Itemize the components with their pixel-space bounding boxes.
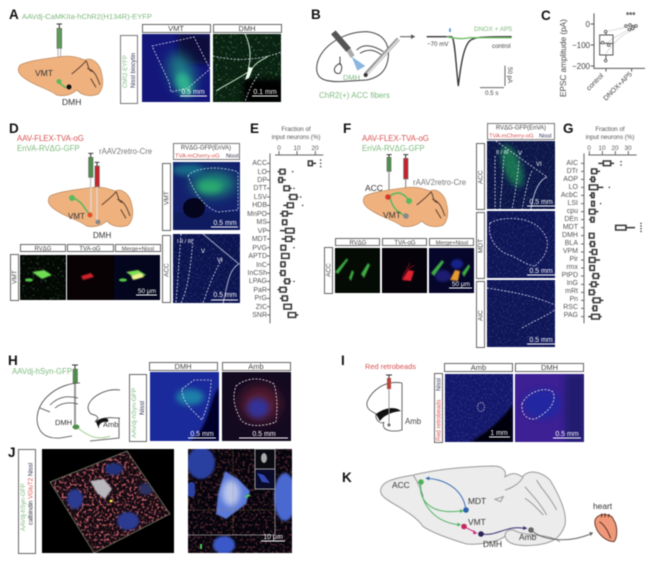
virus labels: AAV-FLEX-TVA-oG — [362, 134, 429, 143]
Amb label: Amb — [405, 417, 422, 426]
brain diagram: ACC — [365, 183, 383, 193]
header Amb: Amb — [248, 362, 264, 371]
C axis labels: DNOX+AP5 — [602, 71, 634, 102]
MDT micrograph — [486, 210, 556, 279]
circuit labels: heart — [593, 501, 613, 511]
panel H — [8, 353, 291, 442]
virus labels — [17, 134, 152, 156]
micrograph DMH — [149, 371, 220, 442]
syringe and brainstem section — [367, 375, 402, 431]
coronal section: DMH — [55, 418, 72, 427]
image headers: Merge+Nissl — [122, 246, 154, 252]
header Amb — [444, 363, 512, 372]
micrograph VMT: 0.5 mm — [181, 89, 205, 96]
region labels: LSI — [567, 200, 578, 207]
circuit labels: Amb — [519, 532, 537, 542]
region labels: VP — [258, 228, 267, 235]
C axis labels — [559, 11, 636, 102]
confocal micrograph — [187, 448, 293, 554]
region labels: Pir — [569, 256, 579, 263]
C axis labels: 0 — [586, 20, 591, 29]
panel letter J: J — [8, 445, 16, 460]
region labels: mRt — [565, 288, 578, 295]
ACC micrograph: 0.5 mm — [529, 199, 553, 206]
brainstem section — [88, 390, 120, 441]
EPSC amplitude boxplot — [591, 13, 645, 72]
micrograph merge — [428, 247, 475, 294]
C axis labels: *** — [626, 11, 636, 20]
region labels: AcbC — [561, 192, 578, 199]
micrograph TVA-oG — [66, 254, 115, 301]
brain diagram: VMT — [35, 68, 53, 78]
micrograph merge: 50 μm — [452, 281, 470, 288]
ACC side box — [476, 144, 484, 210]
region labels: VPM — [563, 248, 578, 255]
ACC micrograph: V — [201, 249, 205, 255]
AIC micrograph: 0.5 mm — [529, 337, 553, 344]
retrobead label: Red retrobeads — [365, 362, 416, 371]
panel K — [342, 466, 617, 549]
virus labels: EnVA-RVΔG-GFP — [362, 144, 425, 153]
virus labels: rAAV2retro-Cre — [413, 178, 466, 187]
region labels: MDT — [563, 224, 579, 231]
region labels: MS — [256, 219, 267, 226]
C axis labels: −200 — [572, 62, 591, 71]
trace labels: −70 mV — [427, 41, 449, 48]
VMT side box — [162, 164, 170, 230]
micrograph RVdG — [334, 247, 381, 294]
ACC micrograph: V — [518, 151, 522, 157]
region labels: ACC — [252, 160, 267, 167]
region labels: PVG — [252, 245, 267, 252]
panel A — [9, 7, 283, 107]
header Amb: Amb — [471, 363, 486, 372]
chart title — [272, 126, 320, 152]
chart title: Fraction of — [281, 126, 311, 133]
grey brain outline — [381, 466, 565, 546]
trace labels: 0.5 s — [485, 90, 498, 97]
trace labels: control — [492, 43, 511, 50]
region labels: HDB — [252, 202, 267, 209]
region labels: MnPO — [247, 211, 268, 218]
image headers: TVA-oG — [394, 240, 416, 246]
panel letter E: E — [250, 121, 259, 136]
panel J — [8, 445, 296, 554]
right header: TVA-mCherry-oG — [489, 134, 534, 140]
header VMT: VMT — [168, 24, 184, 33]
region labels: PtPD — [562, 272, 578, 279]
virus labels: rAAV2retro-Cre — [99, 147, 152, 156]
micrograph merge — [113, 254, 161, 301]
C axis labels: control — [585, 72, 606, 92]
circuit arrows — [420, 476, 593, 540]
3D micrograph — [41, 448, 175, 554]
ACC side label: ACC — [326, 263, 332, 277]
VMT side label: VMT — [12, 270, 18, 284]
micrograph Amb — [221, 371, 292, 442]
stain label box — [120, 36, 138, 104]
panel C — [541, 8, 645, 102]
right header: RVΔG-GFP(EnVA) — [496, 126, 546, 132]
VMT side label — [10, 254, 18, 300]
fraction boxplot — [267, 151, 323, 323]
chart title: 10 — [598, 145, 606, 152]
region labels: DP — [257, 177, 267, 184]
chart title — [586, 126, 634, 152]
ACC micrograph: VI — [536, 162, 542, 168]
panel letter K: K — [342, 470, 352, 485]
stain label box: calbindin VGluT2 Nissl — [28, 463, 34, 525]
trace labels: DNOX + AP5 — [474, 26, 512, 33]
region labels: DMH — [562, 232, 578, 239]
MDT side box: MDT — [478, 239, 484, 253]
header DMH: DMH — [174, 362, 192, 371]
image headers — [20, 244, 160, 252]
image headers: RVΔG — [35, 246, 52, 252]
brain diagram: DMH — [93, 231, 111, 240]
micrograph DMH: 0.5 mm — [555, 431, 579, 438]
panel letter A: A — [9, 7, 19, 22]
panel I — [341, 353, 585, 442]
MDT micrograph: 0.5 mm — [529, 268, 553, 275]
chart title: 0 — [277, 145, 281, 152]
brain slice with optic fiber and pipette — [317, 32, 415, 82]
chart title: input neurons (%) — [272, 134, 320, 141]
panel F — [324, 121, 555, 348]
panel G — [561, 121, 641, 323]
region labels: DTr — [567, 168, 579, 175]
fraction boxplot — [581, 151, 641, 323]
panel letter H: H — [8, 353, 18, 368]
DMH label: DMH — [343, 73, 360, 82]
region labels: RSC — [563, 304, 578, 311]
micrograph DMH — [212, 33, 282, 103]
ACC micrograph: I II / III — [177, 239, 193, 245]
region labels: PAG — [564, 312, 578, 319]
right header: RVΔG-GFP(EnVA) — [181, 146, 231, 152]
C axis labels: EPSC amplitude (pA) — [559, 19, 568, 97]
right header: TVA-mCherry-oG — [175, 154, 220, 160]
right header: Nissl — [226, 154, 239, 160]
ACC micrograph: 0.5 mm — [213, 292, 237, 299]
region labels — [561, 160, 579, 319]
micrograph DMH: 0.1 mm — [253, 89, 277, 96]
stain label box — [18, 450, 36, 554]
ACC micrograph: VI — [217, 258, 223, 264]
micrograph Amb: 1 mm — [490, 430, 508, 437]
micrograph Amb — [444, 373, 514, 443]
region labels: PrG — [255, 295, 267, 302]
AIC micrograph — [486, 279, 556, 348]
stain label box: Nissl biocytin — [131, 53, 137, 88]
brain diagram: VMT — [68, 212, 85, 221]
header DMH — [214, 24, 282, 33]
header DMH — [150, 362, 218, 371]
image headers — [336, 238, 474, 246]
circuit labels: MDT — [468, 496, 486, 506]
panel letter G: G — [563, 121, 574, 136]
icon: heart — [595, 513, 617, 542]
ACC side label — [324, 248, 332, 294]
brain diagram — [48, 178, 133, 240]
syringes — [88, 153, 99, 223]
ACC micrograph — [486, 140, 556, 210]
virus labels: AAV-FLEX-TVA-oG — [17, 134, 84, 143]
region labels: Pn — [569, 296, 578, 303]
coronal section — [37, 383, 80, 438]
right header — [174, 144, 240, 160]
panel letter C: C — [541, 8, 551, 23]
panel D — [9, 121, 240, 303]
VMT micrograph — [172, 161, 241, 231]
trace labels — [427, 26, 513, 97]
panel B — [311, 7, 513, 100]
virus labels — [362, 134, 466, 187]
region labels: InG — [567, 280, 578, 287]
brain diagram — [363, 183, 448, 227]
region labels: DTT — [253, 185, 268, 192]
header DMH: DMH — [541, 363, 558, 372]
syringes — [387, 155, 408, 215]
brain diagram: DMH — [62, 97, 81, 107]
ACC side box — [162, 236, 170, 302]
image headers: TVA-oG — [79, 246, 101, 252]
region labels: rmx — [566, 264, 578, 271]
brain diagram: VMT — [383, 210, 401, 220]
ACC micrograph — [172, 233, 241, 304]
micrograph merge: 50 μm — [138, 288, 156, 295]
circuit labels: VMT — [468, 517, 486, 527]
region labels: AIC — [566, 160, 578, 167]
image headers: Merge+Nissl — [436, 240, 468, 246]
circuit labels — [392, 480, 613, 549]
micrograph Amb: 0.5 mm — [252, 431, 276, 438]
region labels: PaR — [253, 287, 267, 294]
ACC side box: ACC — [164, 263, 170, 277]
panel letter I: I — [341, 353, 345, 368]
chart title: Fraction of — [595, 126, 625, 133]
VMT side box: VMT — [164, 191, 170, 205]
region labels: AOP — [563, 176, 578, 183]
stain label box: Red retrobeads — [436, 400, 442, 441]
stain label box: AAVdj-hSyn-GFP — [131, 388, 138, 438]
region labels: InCSh — [248, 270, 267, 277]
region labels: LO — [569, 184, 579, 191]
panel letter F: F — [343, 121, 351, 136]
chart title: 0 — [587, 145, 591, 152]
C axis labels: −100 — [572, 41, 591, 50]
region labels: MDT — [252, 236, 268, 243]
right header: Nissl — [539, 134, 552, 140]
region labels: InC — [256, 262, 267, 269]
header VMT — [142, 24, 210, 33]
brainstem section: Amb — [103, 420, 118, 429]
stain label box: AAVdj-hSyn-GFP — [20, 483, 27, 531]
ACC side box: ACC — [478, 170, 484, 184]
region labels: BLA — [565, 240, 578, 247]
chart title: 20 — [611, 145, 619, 152]
stain label box: Nissl — [436, 378, 442, 391]
header Amb — [222, 362, 290, 371]
confocal micrograph: 10 μm — [263, 534, 283, 541]
region labels: cpu — [567, 208, 578, 215]
circuit labels: ACC — [392, 480, 410, 490]
injection syringe — [57, 24, 62, 82]
fiber label: ChR2(+) ACC fibers — [319, 91, 390, 100]
trace labels: 50 pA — [506, 67, 513, 84]
stain label box: Nissl — [139, 400, 146, 415]
virus label: AAVdj-CaMKIIa-hChR2(H134R)-EYFP — [22, 12, 152, 21]
micrograph TVA-oG — [381, 247, 428, 294]
AIC side box — [476, 282, 484, 348]
chart title: input neurons (%) — [586, 134, 634, 141]
panel letter D: D — [9, 121, 19, 136]
stain label box: ChR2-EYFP — [123, 55, 129, 88]
region labels — [247, 160, 268, 319]
stain label box — [434, 374, 442, 442]
projection line — [72, 424, 110, 438]
circuit labels: DMH — [483, 539, 502, 549]
VMT micrograph: 0.5 mm — [213, 220, 237, 227]
region labels: APTD — [248, 253, 267, 260]
chart title: 30 — [624, 145, 632, 152]
chart title: 20 — [311, 145, 319, 152]
region labels: LSV — [254, 194, 267, 201]
ACC micrograph: II / III — [496, 150, 509, 156]
header DMH — [516, 363, 584, 372]
AIC side box: AIC — [478, 310, 484, 321]
syringe — [72, 365, 78, 425]
panel letter B: B — [311, 7, 321, 22]
circuit nodes — [418, 479, 534, 537]
micrograph DMH: 0.5 mm — [190, 431, 214, 438]
virus labels: EnVA-RVΔG-GFP — [17, 144, 80, 153]
panel E — [247, 121, 323, 323]
region labels: DEn — [564, 216, 578, 223]
virus label: AAVdj-hSyn-GFP — [12, 367, 72, 376]
region labels: SNR — [252, 312, 267, 319]
EPSC traces — [427, 28, 512, 88]
brain diagram — [18, 56, 103, 107]
micrograph RVdG — [19, 254, 67, 301]
region labels: ZIC — [256, 304, 267, 311]
micrograph DMH — [514, 373, 585, 443]
stain label box — [130, 374, 146, 442]
region labels: LPAG — [249, 278, 267, 285]
micrograph VMT — [141, 33, 211, 103]
chart title: 10 — [293, 145, 301, 152]
right header — [488, 124, 554, 140]
MDT side box — [476, 212, 484, 278]
region labels: LO — [258, 169, 268, 176]
header DMH: DMH — [238, 24, 256, 33]
image headers: RVΔG — [350, 240, 367, 246]
